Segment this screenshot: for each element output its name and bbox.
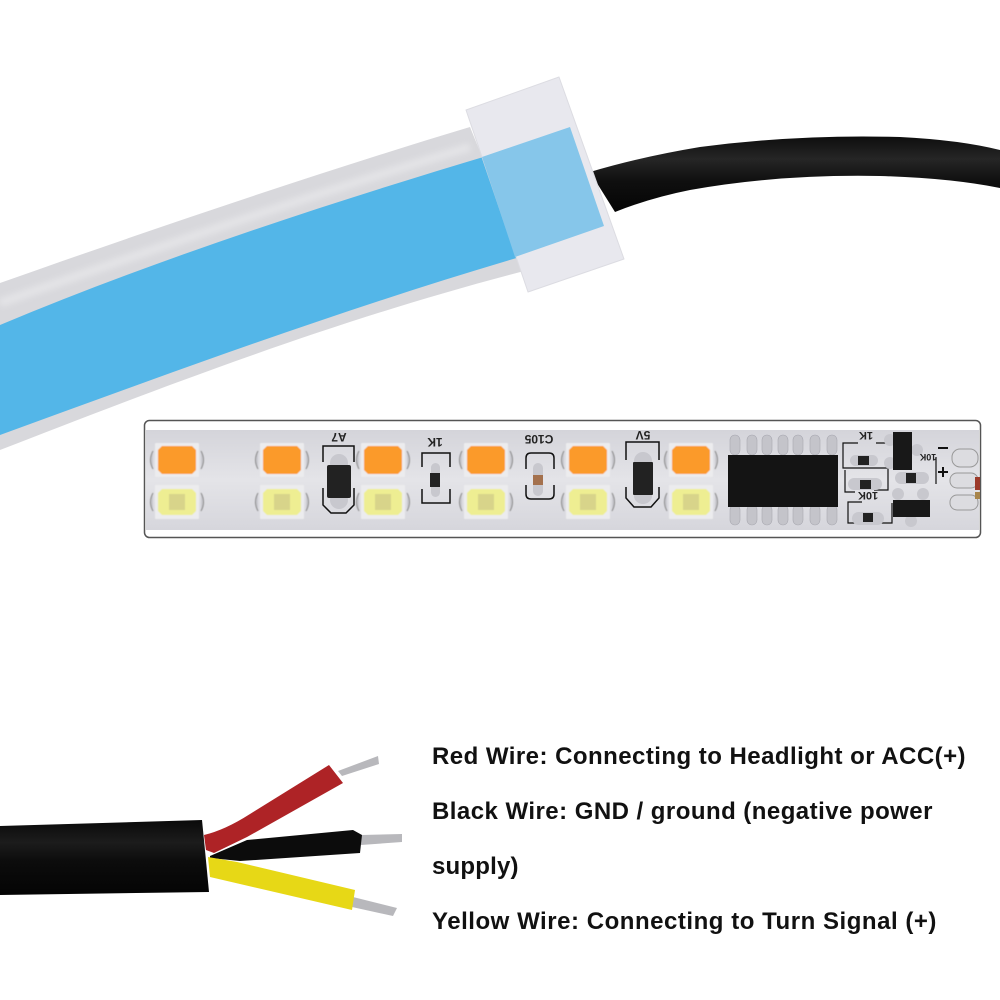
strip board [146, 430, 979, 530]
red wire strand [338, 756, 379, 776]
tube highlight [0, 147, 470, 303]
LED pairs [150, 443, 718, 519]
black wire [210, 830, 362, 861]
control circuit components: 1K [859, 429, 873, 441]
sheath texture [0, 844, 200, 852]
diode A7: A7 [331, 430, 347, 444]
strip outline [144, 420, 980, 538]
wiring description text [432, 743, 966, 935]
resistor 1K [422, 435, 450, 503]
yellow wire strand [352, 897, 397, 916]
control circuit components [843, 429, 948, 527]
diode A7 [323, 430, 354, 513]
red wire [204, 765, 343, 853]
cable to end cap [590, 136, 1000, 212]
integrated circuit [728, 435, 838, 525]
black wire label line 2: supply) [432, 853, 519, 880]
resistor 1K: 1K [427, 435, 443, 449]
LED strip PCB [144, 420, 980, 538]
control circuit components: 10K [919, 452, 936, 462]
control circuit components: 10K [858, 489, 878, 501]
diode 5V [626, 428, 659, 507]
cable sheath [0, 820, 209, 895]
red wire label: Red Wire: Connecting to Headlight or ACC(+) [432, 743, 966, 770]
end cap [466, 77, 624, 292]
capacitor C105: C105 [524, 432, 553, 446]
capacitor C105 [524, 432, 554, 499]
yellow wire [208, 857, 355, 910]
three-core wire [0, 756, 402, 916]
yellow wire label: Yellow Wire: Connecting to Turn Signal (+) [432, 908, 937, 935]
tube blue light strip [0, 155, 520, 435]
black wire label line 1: Black Wire: GND / ground (negative power [432, 798, 933, 825]
diode 5V: 5V [636, 428, 650, 442]
black wire strand [361, 834, 402, 845]
solder pads [950, 449, 980, 510]
tube silicone body [0, 127, 528, 450]
LED tube [0, 77, 1000, 450]
